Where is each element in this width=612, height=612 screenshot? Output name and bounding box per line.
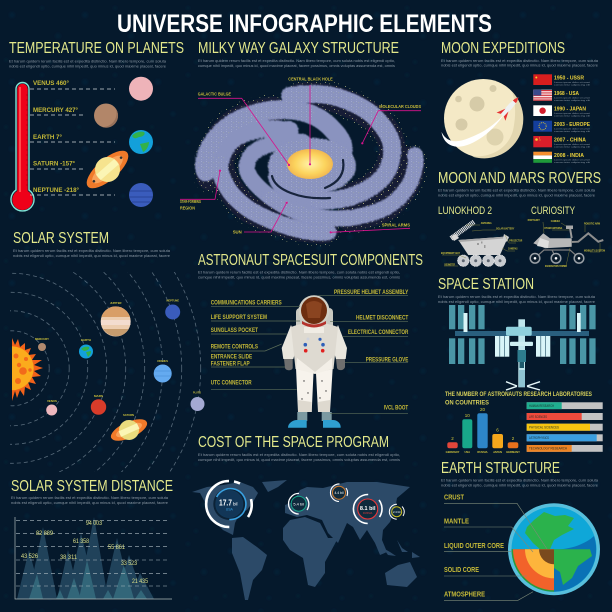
marker: 5.4 bil [289,493,309,514]
text block [198,59,395,68]
progress bars: research: ASTROPHYSICS [529,436,550,440]
astronaut labels and leader lines [211,289,409,413]
heading: COST OF THE SPACE PROGRAM [198,434,389,451]
flag: USA [533,90,591,102]
heading: TEMPERATURE ON PLANETS [9,40,184,57]
text block: Et harum quidem rerum facilis est et expedita distinctio. Nam libero tempore, cum soluta [441,478,598,482]
triangle chart: 21 435 [132,578,148,585]
rover: lunokhod 2 [441,221,522,266]
flag: USA: 1968 - USA [554,91,579,97]
chart heading [445,391,592,406]
title: UNIVERSE INFOGRAPHIC ELEMENTS [117,10,492,38]
text block: Et harum quidem rerum facilis est et expedita distinctio. Nam libero tempore, cum soluta [9,60,166,64]
earth labels and leader lines: LIQUID OUTER CORE [444,541,504,550]
text block [11,496,168,505]
planet: mercury: MERCURY [35,337,49,341]
astronaut labels and leader lines: UTC CONNECTOR [211,380,252,386]
triangle chart: 55 861 [108,544,125,551]
flag: USSR: 1950 - USSR [554,76,584,82]
astronaut labels and leader lines: REMOTE CONTROLS [211,344,258,350]
astronaut figure [282,295,347,428]
astronaut labels and leader lines: ENTRANCE SLIDE [211,354,253,360]
bar chart: countries: 2 [512,436,515,441]
marker: japan: 2.4 bil [393,510,401,514]
text block: nobis est eligendi optio, cumque nihil impedit, quo minus id, quod maxime placeat, facere [11,501,168,505]
text block: Et harum quidem rerum facilis est et expedita distinctio. Nam libero tempore, cum soluta [11,496,168,500]
flag: India [533,152,591,164]
flag: USSR: consectetur adipiscing elit [554,84,591,86]
astronaut labels and leader lines: FASTENER FLAP [211,360,250,367]
marker: 4.4 bil [330,484,348,502]
flag: USA: consectetur adipiscing elit [554,99,591,102]
planet: jupiter: JUPITER [110,301,122,305]
planet: saturn: SATURN [123,413,134,417]
text block [198,270,400,280]
rover: lunokhod 2: CAMERAS [508,246,518,250]
flag: USSR [533,74,591,86]
galaxy labels and pointers: SUN [233,229,242,234]
text block: cumque nihil impedit, quo minus id, quod maxime placeat, facere possimus, omnis voluptas assumenda est, omnis [198,458,400,462]
triangle chart: 33 523 [121,560,137,567]
panel: moon expeditions [441,40,598,164]
flag: USA: Lorem ipsum dolor sit amet [554,96,591,100]
planet: uranus [154,359,172,382]
panel: solar system distance [11,478,173,599]
galaxy labels and pointers [180,76,421,234]
flag: Japan: consectetur adipiscing elit [554,114,591,118]
temperature labels: NEPTUNE -218° [33,186,79,194]
text block [9,60,166,68]
astronaut labels and leader lines: IVCL BOOT [384,404,409,412]
triangle chart: 38 311 [60,554,78,561]
triangle chart [15,517,172,599]
planet: venus: VENUS [47,399,57,403]
flag: China [533,136,591,148]
panel: earth structure [441,460,600,600]
planet: venus [46,399,57,416]
progress bars: research: LIFE SCIENCES [529,415,548,419]
rover: curiosity: OTHER ANTENNA [544,226,562,230]
flag: Europe: Lorem ipsum dolor sit amet [554,128,591,130]
rover: lunokhod 2: SOLAR BATTERY [496,226,514,230]
planet: earth [79,338,93,358]
text block: Et harum quidem rerum facilis est et expedita distinctio. Nam libero tempore, cum soluta nobis est eligendi optio, [198,59,395,63]
panel: space station [438,276,596,390]
galaxy labels and pointers: STAR-FORMING [180,199,201,204]
heading: SPACE STATION [438,276,534,293]
flag: India: consectetur adipiscing elit [554,161,591,164]
text block: nobis est eligendi optio, cumque nihil impedit, quo minus id, quod maxime placeat, facere [441,64,598,68]
planet: mercury [35,337,49,351]
panel: temperature on planets [9,40,184,211]
flag: China: Lorem ipsum dolor sit amet [554,143,591,146]
orbits [10,272,202,472]
chart heading: ON COUNTRIES [445,400,489,406]
planet: neptune [165,298,180,320]
dashed guide lines [30,89,115,195]
flag: India: 2008 - INDIA [554,153,584,159]
marker: 4.4 bil: 4.4 bil [334,491,344,495]
marker: 8.1 bil [353,494,382,524]
temperature labels: EARTH 7° [33,133,62,141]
earth labels and leader lines: CRUST [444,492,464,502]
rover: curiosity: MOBILITY SYSTEM [584,248,606,252]
planet: earth: EARTH [81,338,91,342]
astronaut labels and leader lines: LIFE SUPPORT SYSTEM [211,314,267,321]
marker: 5.4 bil: 5.4 bil [293,502,304,506]
text block [13,249,170,258]
text block [198,453,400,462]
space station illustration [449,305,596,390]
galaxy labels and pointers: MOLECULAR CLOUDS [379,104,421,109]
rover: curiosity: RADIOISOTOPE SYSTEM [545,264,567,268]
temperature labels: VENUS 460° [33,79,69,87]
progress bars: research: PHYSICAL SCIENCES [529,426,560,430]
bar chart: countries [446,407,520,454]
galaxy labels and pointers: CENTRAL BLACK HOLE [288,76,333,82]
cost markers [206,481,404,527]
flag: Japan: Lorem ipsum dolor sit amet [554,112,591,115]
earth labels and leader lines: ATMOSPHERE [444,590,485,598]
panel: milky way galaxy structure [180,40,421,234]
marker: usa 17.7 bil [206,481,252,527]
text block: cumque nihil impedit, quo minus id, quod maxime placeat, facere possimus, omnis voluptas assumenda est, omnis [198,64,395,68]
rover: curiosity: ROBOTIC ARM [584,222,601,226]
text block [441,59,598,68]
flags list [533,74,591,164]
rover: lunokhod 2: EQUIPMENT BAY [441,251,460,255]
bar chart: countries: 10 [465,413,470,418]
rover: curiosity: ROTARY [528,218,540,222]
icon: moon with rocket [442,79,523,158]
astronaut labels and leader lines: HELMET DISCONNECT [356,315,409,322]
panel: astronauts research laboratories [445,391,603,454]
text block: cumque nihil impedit, quo minus id, quod maxime placeat, facere possimus, omnis voluptas assumenda est, omnis [198,276,400,280]
text block: nobis est eligendi optio, cumque nihil impedit, quo minus id, quod maxime placeat, facere [438,194,595,198]
astronaut labels and leader lines: PRESSURE HELMET ASSEMBLY [334,289,409,296]
subheading: lunokhod 2: LUNOKHOD 2 [438,205,492,217]
bar chart: countries: 6 [496,428,499,432]
heading: ASTRONAUT SPACESUIT COMPONENTS [198,252,423,269]
planet: saturn [107,413,151,447]
galaxy labels and pointers: SPIRAL ARMS [382,223,410,228]
triangle chart: 61 358 [73,538,89,545]
temperature labels [33,79,79,194]
marker: usa 17.7 bil: bil [233,502,238,506]
flag: Europe [533,121,591,133]
text block: nobis est eligendi optio, cumque nihil impedit, quo minus id, quod maxime placeat, facere [438,300,595,304]
world map [192,480,420,600]
planet: jupiter [101,301,131,336]
astronaut labels and leader lines: ELECTRICAL CONNECTOR [348,329,408,336]
text block: Et harum quidem rerum facilis est et expedita distinctio. Nam libero tempore, cum soluta nobis est eligendi optio, [198,453,400,457]
icon: sun [12,338,43,401]
flag: USSR: Lorem ipsum dolor sit amet [554,81,591,84]
progress bars: research: HUMAN RESEARCH [529,404,554,408]
text block [438,295,595,304]
planet: pluto: PLUTO [193,390,202,394]
progress bars: research [527,402,603,452]
flag: Japan: 1990 - JAPAN [554,106,586,112]
text block: nobis est eligendi optio, cumque nihil impedit, quo minus id, quod maxime placeat, facere [441,484,598,488]
text block: nobis est eligendi optio, cumque nihil impedit, quo minus id, quod maxime placeat, facere [9,64,166,68]
flag: China: consectetur adipiscing elit [554,146,591,148]
heading: MOON EXPEDITIONS [441,40,565,57]
flag: Japan [533,105,591,118]
icon: neptune [129,183,153,207]
icon: mercury [94,104,118,128]
rover: lunokhod 2: PROJECTOR [509,238,522,242]
panel: solar system [10,232,204,472]
bar chart: countries: GERMANY [446,450,460,454]
heading: MILKY WAY GALAXY STRUCTURE [198,40,399,57]
text block: Et harum quidem rerum facilis est et expedita distinctio. Nam libero tempore, cum soluta [441,59,598,63]
marker: 8.1 bil: RUSSIA [363,512,373,515]
panel: cost of the space program [192,434,420,600]
astronaut labels and leader lines: COMMUNICATIONS CARRIERS [211,300,282,307]
marker: 8.1 bil: 8.1 bil [360,506,376,512]
earth labels and leader lines: MANTLE [444,516,469,526]
marker: usa 17.7 bil: USA [226,508,234,512]
text block [441,478,598,488]
galaxy illustration [205,94,416,232]
marker: japan [389,504,404,519]
planet: neptune: NEPTUNE [166,298,179,302]
triangle chart: 94 003 [86,520,102,527]
text block: Et harum quidem rerum facilis est et expedita distinctio. Nam libero tempore, cum soluta [438,295,595,299]
earth labels and leader lines: SOLID CORE [444,565,479,574]
planet: mars: MARS [94,394,103,398]
thermometer [11,83,34,211]
text block: Et harum quidem rerum facilis est et expedita distinctio. Nam libero tempore, cum soluta nobis est eligendi optio, [198,270,400,274]
rover: curiosity [528,218,606,268]
progress bars: research: TECHNOLOGY RESEARCH [529,447,568,451]
marker: usa 17.7 bil: 17.7 [219,498,232,508]
flag: Europe: consectetur adipiscing elit [554,130,591,133]
triangle chart: 82 889 [36,530,53,537]
planet: pluto [190,390,204,411]
bar chart: countries: JAPAN [493,450,502,454]
planet: mars [91,394,106,415]
bar chart: countries: RUSSIA [477,450,488,454]
text block: Et harum quidem rerum facilis est et expedita distinctio. Nam libero tempore, cum soluta [13,249,170,253]
text block: Et harum quidem rerum facilis est et expedita distinctio. Nam libero tempore, cum soluta [438,188,595,192]
planets [35,298,204,447]
triangle chart: 43 526 [21,553,38,560]
planet: uranus: URANUS [157,359,168,363]
heading: SOLAR SYSTEM [13,230,109,247]
bar chart: countries: 2 [451,436,454,441]
rover: curiosity: CAMERA [551,219,560,223]
bar chart: countries: USA [464,450,470,454]
rover: lunokhod 2: ANTENNA [481,221,492,225]
rover: lunokhod 2: ODOMETER [444,262,455,266]
panel: moon and mars rovers [438,170,606,268]
icon: saturn [80,143,135,196]
flag: Europe: 2003 - EUROPE [554,122,590,128]
temperature labels: MERCURY 427° [33,106,78,114]
galaxy labels and pointers: GALACTIC BULGE [198,92,231,96]
heading: EARTH STRUCTURE [441,460,560,477]
panel: astronaut spacesuit components [198,252,423,428]
text block [438,188,595,198]
bar chart: countries: 20 [480,407,485,412]
heading: SOLAR SYSTEM DISTANCE [11,478,173,495]
icon: venus [129,77,153,101]
flag: China: 2007 - CHINA [554,138,586,144]
astronaut labels and leader lines: SUNGLASS POCKET [211,327,259,334]
flag: India: Lorem ipsum dolor sit amet [554,158,591,162]
icon: earth [129,130,153,154]
text block: nobis est eligendi optio, cumque nihil impedit, quo minus id, quod maxime placeat, facere [13,254,170,258]
astronaut labels and leader lines: PRESSURE GLOVE [366,356,409,364]
subheading: curiosity: CURIOSITY [531,205,575,217]
earth labels and leader lines [444,492,547,600]
earth cross-section [508,503,600,595]
temperature labels: SATURN -157° [33,160,75,168]
bar chart: countries: GERMANY [506,450,520,454]
galaxy labels and pointers: REGION [180,206,195,210]
